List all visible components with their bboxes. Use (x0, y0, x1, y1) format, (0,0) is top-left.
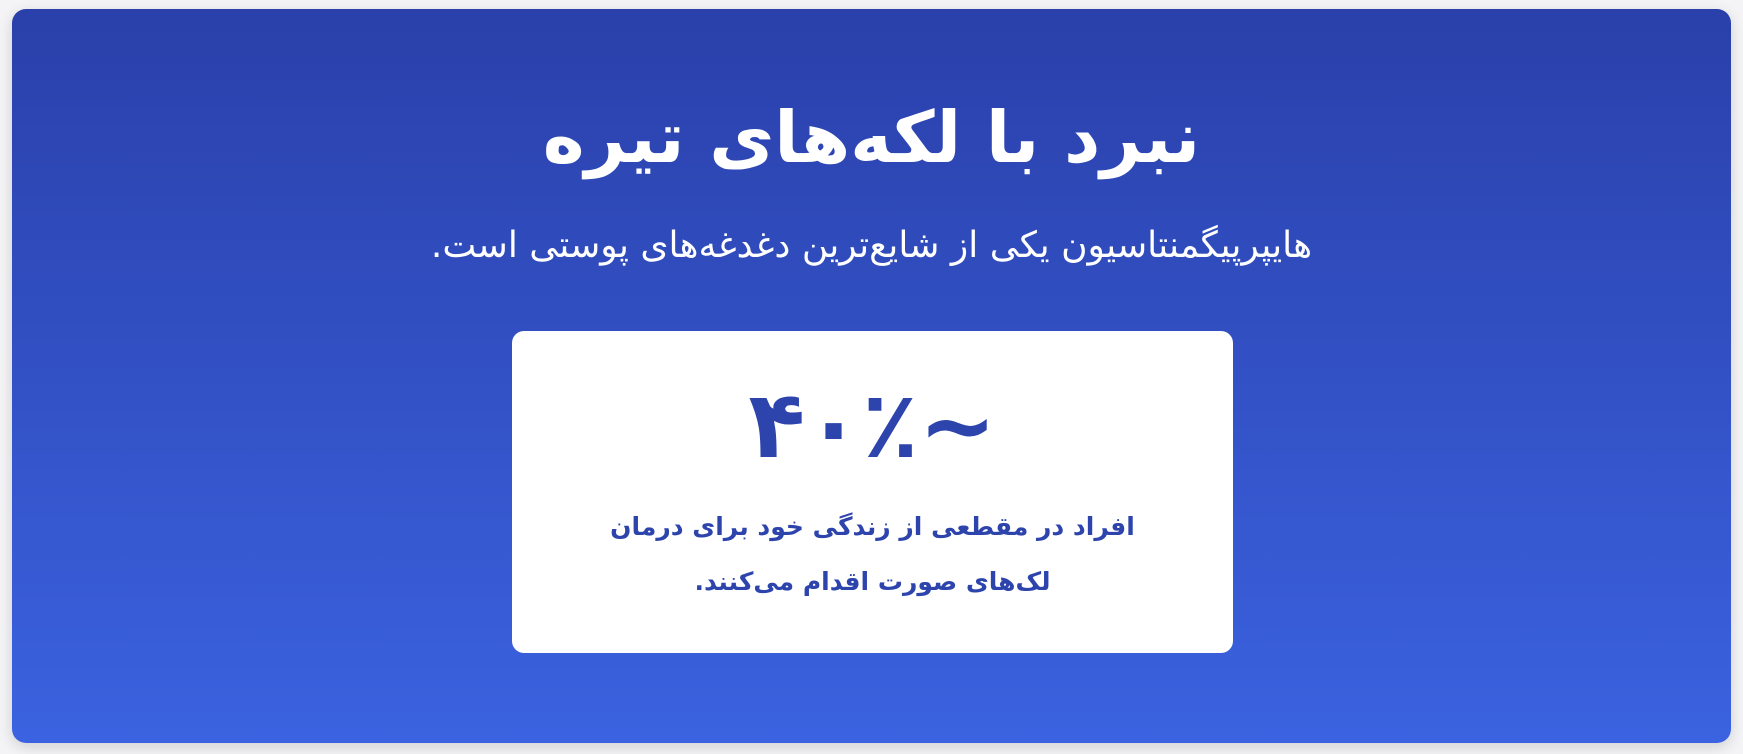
stat description: لک‌های صورت اقدام می‌کنند. (694, 567, 1050, 596)
subtitle: هایپرپیگمنتاسیون یکی از شایع‌ترین دغدغه‌های پوستی است. (431, 225, 1312, 266)
title: نبرد با لکه‌های تیره (543, 96, 1200, 179)
panel: stat box (512, 331, 1233, 653)
stat number: ~۴۰٪ (748, 371, 997, 479)
stat description (610, 512, 1135, 596)
stat description: افراد در مقطعی از زندگی خود برای درمان (610, 512, 1135, 541)
